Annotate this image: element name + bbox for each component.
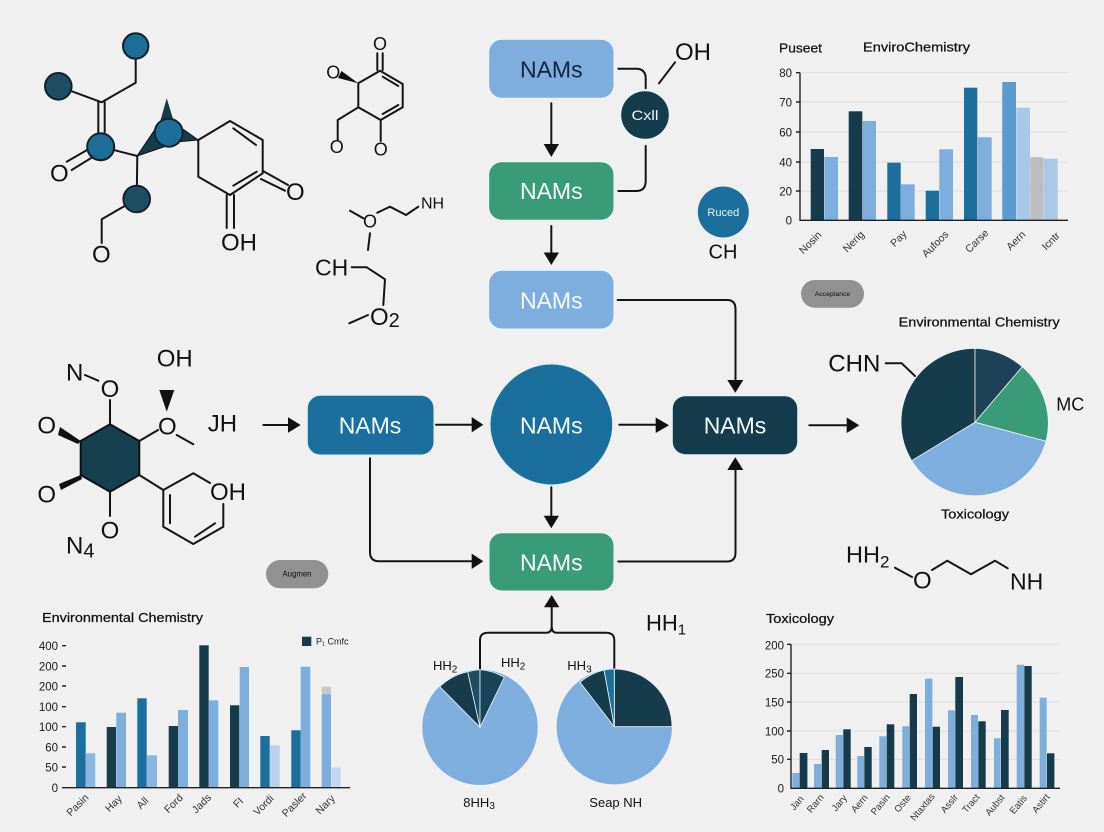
pie chart: bottom centre right: 3	[586, 664, 592, 676]
y-axis labels: 60	[45, 742, 58, 754]
pill: Acceptance	[801, 280, 864, 308]
label: HH1: 1	[678, 622, 686, 639]
molecule: top-left branched structure: O	[286, 179, 305, 206]
molecule: amine chain lower right: O	[913, 568, 932, 594]
flow box: NAMs green lower	[489, 533, 614, 591]
flow node: NAMs circle: NAMs	[520, 413, 583, 439]
flow box: NAMs dark	[672, 396, 798, 455]
chart title: Environmental Chemistry	[42, 610, 204, 625]
y-axis labels: 70	[779, 98, 792, 110]
pie chart: right: CHN	[828, 351, 880, 378]
molecule: hexagon left: N	[66, 532, 83, 559]
molecule: hexagon left: OH	[157, 346, 193, 373]
x-axis labels: Tract	[960, 792, 983, 816]
molecule: amine chain: O	[370, 304, 389, 331]
flow box: NAMs light blue top: NAMs	[520, 56, 583, 82]
pie chart: right	[828, 315, 1084, 521]
molecule: hexagon left: O	[158, 414, 177, 440]
x-axis labels: Icntr	[1040, 230, 1063, 253]
y-axis labels: 100	[39, 702, 58, 714]
pie chart: right: MC	[1056, 395, 1084, 415]
y-axis labels: 0	[778, 784, 784, 796]
pill: Augmen	[266, 560, 328, 588]
y-axis labels: 250	[765, 668, 784, 680]
connector: Cxll node links: Cxll	[632, 107, 658, 123]
arrow: circle to dark box	[619, 418, 669, 433]
y-axis labels: 0	[52, 783, 58, 795]
y-axis labels: 200	[765, 640, 784, 652]
node: Ruced circle with CH	[698, 186, 749, 263]
flow node: NAMs circle	[490, 364, 613, 485]
x-axis labels: Aern	[1004, 229, 1028, 253]
molecule: hexagon left: O	[101, 376, 119, 403]
molecule: top-left branched structure: O	[50, 160, 69, 187]
molecule: top centre ring: O	[330, 137, 344, 157]
molecule: top-left branched structure	[45, 33, 305, 269]
molecule: hexagon left: O	[37, 412, 56, 440]
molecule: amine chain: CH	[315, 255, 348, 281]
molecule: top-left branched structure: O	[92, 242, 111, 269]
molecule: amine chain: O	[363, 212, 377, 232]
y-axis labels: 60	[779, 128, 792, 140]
molecule: hexagon left: OH	[210, 479, 246, 506]
flow box: NAMs dark: NAMs	[704, 412, 766, 438]
pie chart: bottom centre left: 2	[520, 662, 526, 672]
flow box: NAMs light blue third	[489, 270, 614, 329]
x-axis labels	[797, 227, 1063, 260]
x-axis labels: Rarn	[805, 792, 827, 815]
flow box: NAMs green upper	[489, 162, 614, 220]
molecule: hexagon left	[37, 346, 246, 562]
molecule: top centre ring: O	[374, 140, 388, 160]
x-axis labels: Oste	[892, 793, 914, 815]
molecule: top-left branched structure: OH	[221, 230, 257, 257]
pie chart: bottom centre right	[557, 658, 672, 810]
y-axis labels: 200	[39, 662, 58, 674]
molecule: hexagon left: N	[66, 360, 83, 387]
pie chart: bottom centre left: HH	[501, 655, 520, 670]
pill: Acceptance: Acceptance	[815, 291, 850, 298]
y-axis labels: 80	[779, 68, 792, 80]
y-axis labels	[779, 68, 792, 228]
pill: Augmen: Augmen	[282, 570, 312, 578]
arrow: pies up to green box	[480, 595, 614, 670]
x-axis labels: Carse	[963, 227, 991, 256]
flow box: NAMs teal: NAMs	[339, 413, 401, 439]
y-axis labels: 200	[39, 682, 58, 694]
x-axis labels: Eatis	[1008, 793, 1030, 817]
bar chart: top right	[779, 40, 1068, 260]
x-axis labels: Aubst	[983, 792, 1008, 818]
y-axis labels: 50	[45, 762, 58, 774]
molecule: amine chain lower right: HH	[846, 542, 880, 568]
x-axis labels	[64, 790, 338, 820]
molecule: amine chain lower right: 2	[880, 553, 889, 572]
y-axis labels: 150	[765, 698, 784, 710]
molecule: hexagon left: 4	[83, 540, 94, 562]
pie chart: right: Environmental Chemistry	[899, 315, 1060, 330]
y-axis labels: 0	[786, 216, 792, 228]
molecule: amine chain: 2	[389, 310, 400, 332]
x-axis labels: Jads	[190, 792, 214, 816]
connector: third box to dark box	[618, 300, 743, 393]
arrow: circle down to green box	[544, 487, 559, 528]
x-axis labels: Nosin	[797, 229, 824, 257]
x-axis labels: Jary	[830, 793, 850, 814]
x-axis labels: Aern	[849, 793, 870, 815]
flow box: NAMs green upper: NAMs	[520, 178, 583, 204]
x-axis labels: Pasler	[280, 790, 310, 820]
pie chart: bottom centre right: HH	[567, 658, 586, 673]
flow box: NAMs teal	[307, 395, 434, 455]
y-axis labels: 50	[771, 754, 784, 766]
connector: green box up to dark box	[618, 457, 743, 562]
molecule: top centre ring	[326, 34, 403, 160]
pie chart: bottom centre left: HH	[433, 658, 452, 673]
bar chart: bottom left	[39, 610, 350, 820]
x-axis labels: Nary	[313, 792, 338, 817]
molecule: hexagon left: O	[101, 518, 119, 544]
arrow: teal box to circle	[436, 417, 483, 432]
chart titles: Puseet	[779, 40, 822, 56]
arrow: green box to blue box	[544, 226, 559, 265]
molecule: amine chain: NH	[421, 195, 444, 212]
x-axis labels: Ford	[162, 792, 186, 816]
label: HH1: HH	[646, 611, 678, 636]
arrow: dark box to pie	[809, 418, 859, 433]
node: Ruced circle with CH: Ruced	[707, 207, 739, 219]
x-axis labels: Ntaxtas	[909, 791, 938, 823]
x-axis labels: Astirt	[1030, 792, 1053, 816]
y-axis labels: 100	[765, 726, 784, 738]
legend: P₁ Cmfc	[316, 636, 349, 646]
x-axis labels: Aufoos	[920, 229, 951, 260]
chart titles	[779, 40, 971, 56]
arrow: into teal box	[263, 417, 301, 433]
x-axis labels: Jan	[788, 794, 807, 813]
chart titles: EnviroChemistry	[863, 40, 971, 54]
y-axis labels: 100	[39, 722, 58, 734]
pie chart: bottom centre left: 8HH	[463, 795, 489, 810]
node: Ruced circle with CH: CH	[708, 241, 737, 263]
flow box: NAMs green lower: NAMs	[520, 550, 583, 576]
bar chart: bottom right	[765, 611, 1060, 823]
flow box: NAMs light blue third: NAMs	[520, 287, 583, 313]
y-axis labels	[765, 640, 784, 796]
molecule: hexagon left: JH	[208, 411, 237, 438]
arrow: top box to green box	[544, 103, 559, 157]
x-axis labels: Vordi	[251, 793, 277, 818]
x-axis labels: FI	[231, 795, 246, 810]
y-axis labels: 20	[779, 186, 792, 198]
molecule: top centre ring: O	[326, 63, 340, 83]
connector: Cxll node links: OH	[675, 39, 711, 66]
y-axis labels	[39, 641, 58, 795]
molecule: amine chain	[315, 195, 444, 332]
connector: teal box to green box	[370, 458, 483, 569]
pie chart: bottom centre left	[422, 655, 538, 812]
x-axis labels: Nerig	[841, 229, 867, 255]
chart title: Toxicology	[766, 611, 835, 626]
molecule: top centre ring: O	[373, 34, 387, 54]
pie chart: bottom centre right: Seap NH	[589, 795, 642, 810]
pie chart: bottom centre left: 2	[452, 664, 458, 676]
molecule: hexagon left: O	[37, 482, 56, 508]
x-axis labels	[788, 791, 1053, 823]
molecule: amine chain lower right: NH	[1010, 568, 1043, 594]
x-axis labels: Hay	[103, 793, 125, 815]
x-axis labels: Pasin	[64, 792, 92, 819]
pie chart: right: Toxicology	[941, 506, 1010, 521]
molecule: amine chain lower right	[846, 542, 1043, 594]
x-axis labels: All	[135, 795, 151, 812]
flow box: NAMs light blue top	[489, 39, 614, 98]
x-axis labels: Pasin	[869, 792, 893, 818]
pie chart: bottom centre left: 3	[489, 801, 495, 812]
legend	[302, 636, 349, 646]
y-axis labels: 400	[39, 641, 58, 653]
x-axis labels: Asslr	[939, 792, 961, 816]
x-axis labels: Pay	[888, 228, 910, 250]
y-axis labels: 40	[779, 158, 792, 170]
connector: Cxll node links	[618, 39, 711, 191]
